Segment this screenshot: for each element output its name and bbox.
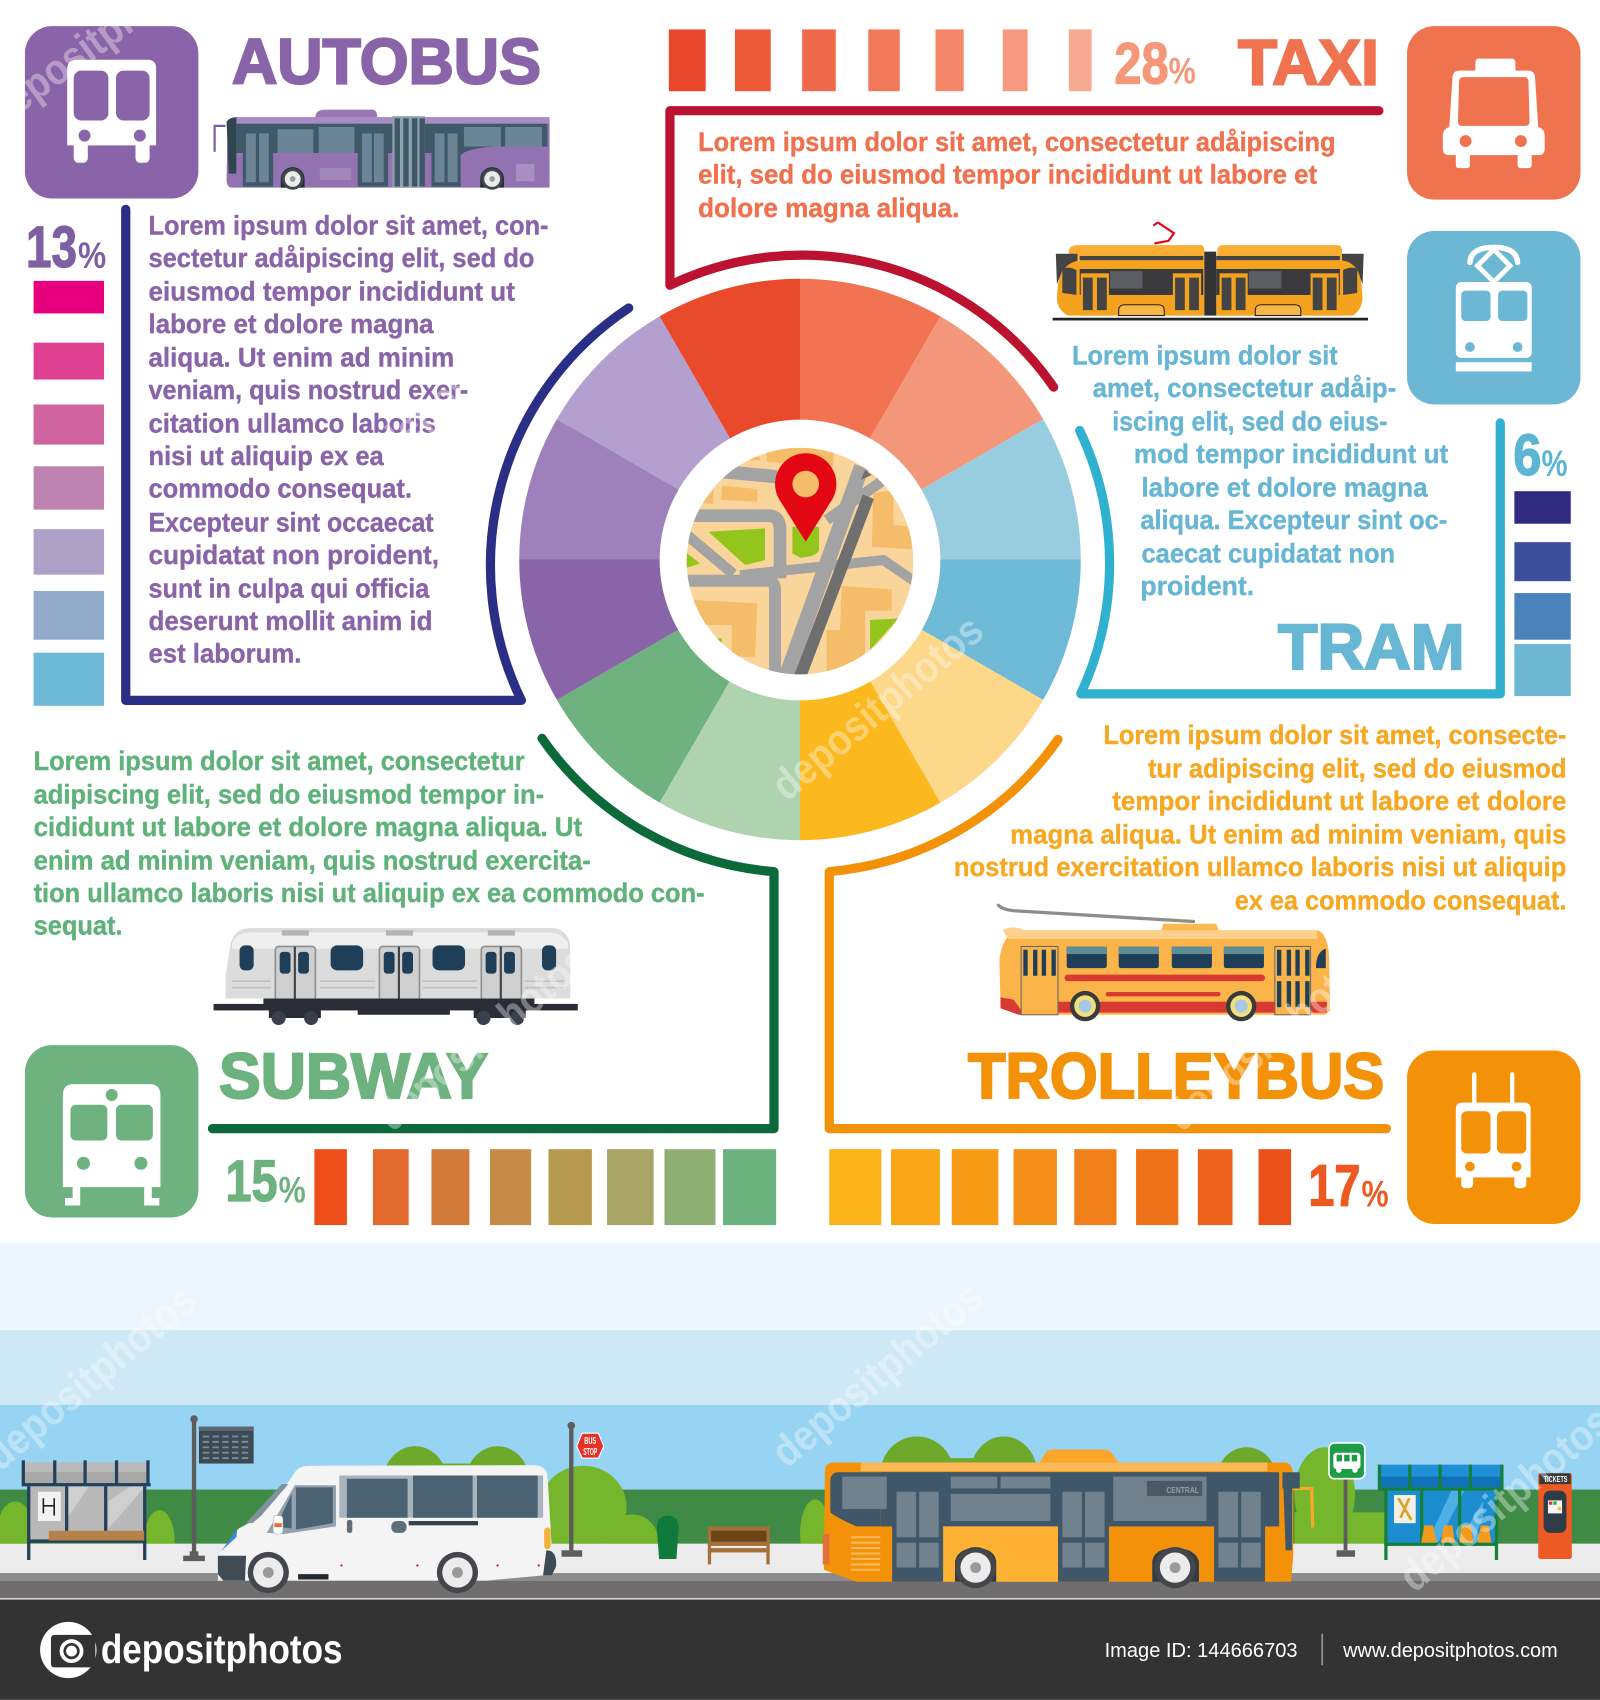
text block: trolleybus: tur adipiscing elit, sed do eiusmod <box>1148 753 1566 783</box>
text block: tram: labore et dolore magna <box>1141 473 1428 503</box>
ticket machine: TICKETS <box>1544 1475 1568 1484</box>
map illustration <box>683 445 917 679</box>
text block: trolleybus: Lorem ipsum dolor sit amet, consecte- <box>1104 720 1566 750</box>
illustration: subway car <box>214 928 578 1025</box>
stat: 17 percent: % <box>1362 1174 1389 1215</box>
watermarks: depositphotos <box>368 937 598 1141</box>
timetable post <box>183 1415 254 1561</box>
text block: autobus: sunt in culpa qui officia <box>149 573 429 603</box>
text block: autobus: aliqua. Ut enim ad minim <box>149 343 454 373</box>
bar scale: tram <box>1514 491 1571 696</box>
heading: tram: TRAM <box>1278 611 1464 683</box>
bus stop sign green <box>1329 1443 1365 1557</box>
text block: taxi <box>698 127 1336 223</box>
stat: 17 percent: 17 <box>1308 1154 1360 1219</box>
text block: trolleybus: magna aliqua. Ut enim ad minim veniam, quis <box>1010 819 1566 849</box>
stat: 6 percent <box>1513 423 1567 488</box>
text block: tram: Lorem ipsum dolor sit <box>1072 340 1338 370</box>
text block: autobus: commodo consequat. <box>149 474 412 504</box>
text block: tram: amet, consectetur adåip- <box>1093 373 1396 403</box>
stat: 28 percent: 28 <box>1114 32 1169 97</box>
stat: 13 percent: % <box>78 235 106 276</box>
icon: subway <box>25 1045 198 1217</box>
website: www.depositphotos.com <box>1342 1639 1558 1662</box>
icon: trolleybus <box>1407 1051 1580 1224</box>
text block: tram: aliqua. Excepteur sint oc- <box>1140 505 1447 535</box>
text block: tram: iscing elit, sed do eius- <box>1112 406 1388 436</box>
heading: subway: SUBWAY <box>219 1040 488 1112</box>
text block: tram <box>1072 340 1448 601</box>
image id: Image ID: 144666703 <box>1105 1639 1298 1662</box>
panel: street scene <box>0 1242 1600 1600</box>
bus shelter left <box>22 1460 151 1560</box>
text block: autobus: nisi ut aliquip ex ea <box>149 441 384 471</box>
text block: subway: tion ullamco laboris nisi ut aliquip ex ea commodo con- <box>34 878 705 908</box>
logo text: depositphotos <box>101 1626 343 1672</box>
bus shelter right <box>1378 1465 1504 1560</box>
text block: subway: sequat. <box>34 911 122 941</box>
text block: autobus <box>149 210 549 668</box>
connector line: subway <box>212 738 774 1129</box>
icon: tram <box>1407 231 1580 404</box>
text block: subway: enim ad minim veniam, quis nostrud exercita- <box>34 846 591 876</box>
icon: autobus <box>25 26 198 199</box>
text block: trolleybus: nostrud exercitation ullamco laboris nisi ut aliquip <box>954 852 1566 882</box>
text block: autobus: veniam, quis nostrud exer- <box>149 375 468 405</box>
panel: tram <box>1053 222 1580 696</box>
text block: autobus: est laborum. <box>149 638 301 668</box>
panel: autobus <box>25 26 629 706</box>
watermarks: depositphotos <box>763 606 993 810</box>
bar scale: taxi <box>669 29 1092 91</box>
icon: taxi <box>1407 26 1580 200</box>
text block: subway: Lorem ipsum dolor sit amet, consectetur <box>34 746 525 776</box>
icon: location pin <box>775 453 836 542</box>
text block: autobus: eiusmod tempor incididunt ut <box>149 276 515 306</box>
text block: autobus: sectetur adåipiscing elit, sed do <box>149 243 534 273</box>
heading: taxi: TAXI <box>1238 27 1379 99</box>
text block: autobus: cupidatat non proident, <box>149 540 439 570</box>
connector line: taxi <box>670 111 1379 387</box>
stat: 28 percent: % <box>1169 51 1196 92</box>
text block: subway: adipiscing elit, sed do eiusmod tempor in- <box>34 779 544 809</box>
connector line: autobus <box>126 209 629 700</box>
panel: trolleybus <box>829 720 1580 1225</box>
illustration: white van <box>218 1465 556 1593</box>
stat: 13 percent: 13 <box>26 215 77 280</box>
heading: autobus: AUTOBUS <box>232 26 541 98</box>
text block: subway: cididunt ut labore et dolore magna aliqua. Ut <box>34 812 582 842</box>
watermarks: depositphotos <box>368 265 598 469</box>
bar scale: trolleybus <box>829 1149 1291 1225</box>
illustration: orange city bus <box>823 1449 1313 1588</box>
bus stop sign post: BUS <box>584 1436 596 1447</box>
text block: autobus: deserunt mollit anim id <box>149 606 433 636</box>
illustration: tram <box>1053 222 1368 320</box>
ticket machine <box>1538 1473 1572 1559</box>
bar scale: subway <box>314 1149 776 1225</box>
stat: 15 percent: % <box>279 1169 306 1210</box>
watermarks: depositphotos <box>1157 937 1387 1141</box>
text block: taxi: elit, sed do eiusmod tempor incididunt ut labore et <box>698 159 1317 189</box>
bus stop sign post: STOP <box>583 1447 598 1458</box>
illustration: trolleybus <box>998 905 1330 1021</box>
text block: subway <box>34 746 705 941</box>
bus stop sign post <box>562 1422 604 1557</box>
text block: autobus: Lorem ipsum dolor sit amet, con- <box>149 210 549 240</box>
text block: tram: mod tempor incididunt ut <box>1134 439 1448 469</box>
stat: 15 percent: 15 <box>225 1149 278 1214</box>
text block: autobus: labore et dolore magna <box>149 309 434 339</box>
connector line: tram <box>1080 423 1500 694</box>
heading: trolleybus: TROLLEYBUS <box>968 1040 1384 1112</box>
footer bar <box>0 1600 1600 1700</box>
text block: taxi: dolore magna aliqua. <box>698 193 959 223</box>
text block: autobus: Excepteur sint occaecat <box>149 507 434 537</box>
text block: tram: caecat cupidatat non <box>1141 539 1395 569</box>
text block: trolleybus <box>954 720 1566 916</box>
connector line: trolleybus <box>829 739 1386 1129</box>
wooden bench <box>708 1526 770 1564</box>
text block: trolleybus: ex ea commodo consequat. <box>1235 886 1566 916</box>
sky bands <box>0 1242 1600 1544</box>
text block: taxi: Lorem ipsum dolor sit amet, consectetur adåipiscing <box>698 127 1336 157</box>
text block: tram: proident. <box>1140 571 1254 601</box>
trash bin <box>657 1516 679 1559</box>
logo: depositphotos camera <box>40 1622 96 1678</box>
illustration: orange city bus: CENTRAL <box>1166 1485 1199 1495</box>
text block: trolleybus: tempor incididunt ut labore et dolore <box>1112 786 1566 816</box>
sidewalk and road <box>0 1544 1600 1600</box>
illustration: articulated bus <box>214 110 550 190</box>
panel: subway <box>25 738 776 1225</box>
text block: autobus: citation ullamco laboris <box>149 409 436 439</box>
watermarks: depositphotos <box>763 1273 993 1477</box>
stat: 6 percent: % <box>1541 443 1567 484</box>
bar scale: autobus <box>34 281 104 706</box>
bushes <box>0 1436 1463 1571</box>
chart: donut wheel <box>519 279 1081 840</box>
stat: 6 percent: 6 <box>1513 423 1541 488</box>
panel: taxi <box>669 26 1580 387</box>
